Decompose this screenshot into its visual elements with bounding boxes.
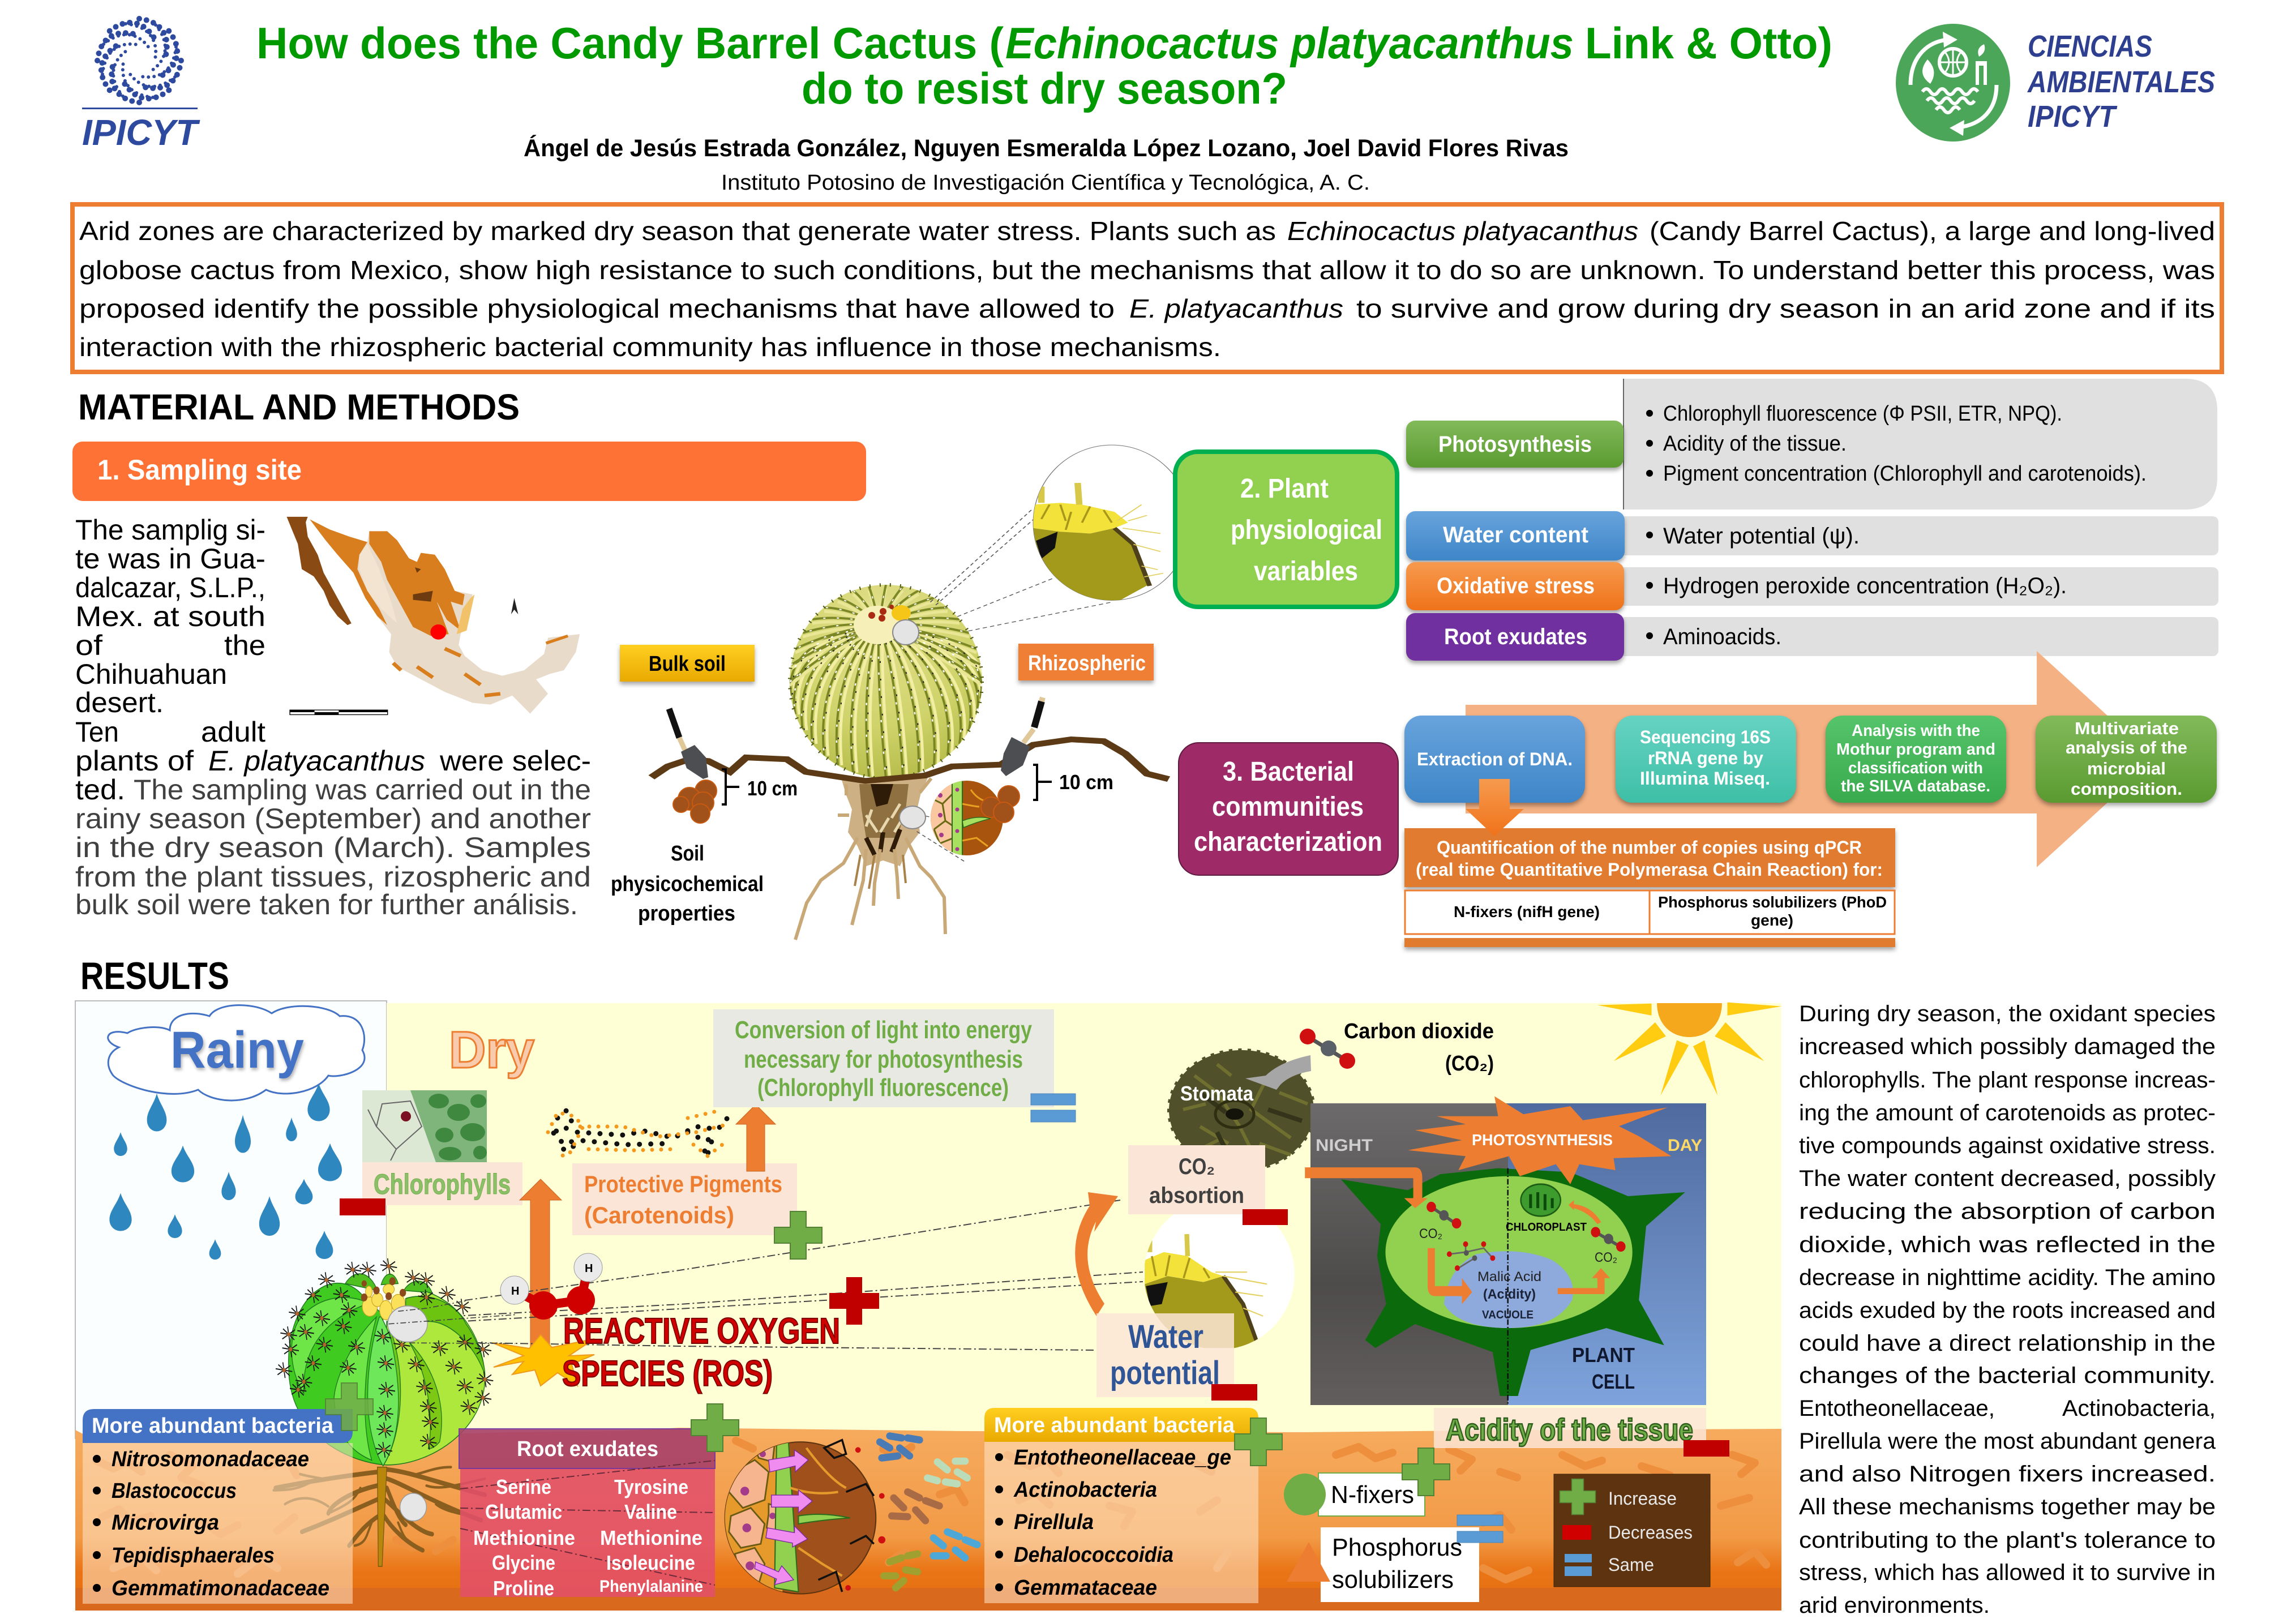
step: sequencing: Sequencing 16S bbox=[1640, 727, 1771, 747]
text: reactive oxygen species bbox=[562, 1311, 840, 1394]
text: sampling site description: plants of bbox=[75, 745, 194, 777]
step: extraction of DNA: Extraction of DNA. bbox=[1417, 749, 1573, 769]
text: sampling site description: Mex. at south bbox=[75, 601, 265, 632]
label: Rhizospheric bbox=[1018, 644, 1154, 680]
panel: plant cell CAM diagram: PLANT bbox=[1572, 1343, 1635, 1367]
logo: IPICYT bbox=[82, 11, 200, 153]
title bbox=[256, 18, 1832, 113]
label: N-fixers bbox=[1284, 1473, 1425, 1516]
heading: results: RESULTS bbox=[80, 954, 229, 997]
text: sampling site description: E. platyacanthus bbox=[208, 745, 425, 777]
panel: bacteria dry: Entotheonellaceae_ge bbox=[1014, 1446, 1231, 1470]
panel: introduction: Echinocactus platyacanthus bbox=[1287, 216, 1638, 246]
panel: bacteria dry: More abundant bacteria bbox=[994, 1414, 1235, 1437]
step: multivariate analysis: microbial bbox=[2087, 759, 2166, 778]
icon: increase for root exudates bbox=[691, 1404, 739, 1451]
text: sampling site description: the bbox=[224, 629, 265, 661]
panel: plant cell CAM diagram: PHOTOSYNTHESIS bbox=[1472, 1131, 1613, 1149]
heading box: 2. Plant physiological variables: 2. Plant bbox=[1240, 474, 1329, 504]
panel: bacteria rainy bbox=[83, 1409, 353, 1604]
icon: same for phosphorus bbox=[1457, 1515, 1503, 1543]
label: 10 cm left: 10 cm bbox=[747, 777, 798, 800]
affiliation: Instituto Potosino de Investigación Científica y Tecnológica, A. C. bbox=[721, 171, 1370, 195]
background: soil bbox=[75, 1428, 1781, 1611]
arrow: from extraction to qPCR bbox=[1466, 779, 1524, 836]
label box: water potential bbox=[1096, 1313, 1234, 1397]
icon: zoomed cactus crown in results bbox=[1144, 1214, 1295, 1348]
panel: bacteria rainy: Tepidisphaerales bbox=[112, 1544, 275, 1568]
step: analysis: Mothur program and bbox=[1836, 740, 1995, 759]
text: sampling site description: adult bbox=[201, 716, 265, 748]
cloud: Rainy: Rainy bbox=[170, 1021, 304, 1079]
text: sampling site description: Ten bbox=[75, 716, 119, 748]
label box: acidity of the tissue: Acidity of the tissue bbox=[1446, 1413, 1693, 1447]
arrow: bacterial workflow bbox=[1466, 651, 2155, 867]
text: reactive oxygen species: REACTIVE OXYGEN bbox=[563, 1311, 840, 1351]
label box: chlorophylls bbox=[362, 1162, 522, 1205]
icon: increase for N-fixers bbox=[1402, 1448, 1450, 1496]
label: Soil physicochemical properties bbox=[611, 842, 764, 926]
heading bar: 1. Sampling site bbox=[72, 442, 866, 501]
icon: rain drops bbox=[109, 1084, 342, 1260]
label box: CO2 absortion: absortion bbox=[1149, 1183, 1244, 1208]
icon: molecule hydrogen peroxide: H bbox=[511, 1285, 519, 1297]
label box: water potential: Water bbox=[1128, 1318, 1203, 1355]
text: sampling site description: ted. bbox=[75, 774, 125, 806]
icon: stomata bbox=[1169, 1050, 1314, 1170]
label: carbon dioxide: Carbon dioxide bbox=[1344, 1020, 1494, 1043]
text: sampling site description: in the dry season (March). Samples bbox=[75, 832, 591, 863]
label box: conversion of light bbox=[713, 1009, 1054, 1107]
icon: decrease for CO2 absortion bbox=[1243, 1209, 1288, 1225]
panel: root exudates list: Glutamic bbox=[485, 1500, 562, 1523]
heading bar: 1. Sampling site: 1. Sampling site bbox=[97, 454, 302, 486]
panel: introduction: (Candy Barrel Cactus), a large and long-lived bbox=[1650, 216, 2215, 246]
step: multivariate analysis: analysis of the bbox=[2066, 738, 2187, 757]
cactus spines bbox=[276, 1258, 493, 1458]
label: Rhizospheric: Rhizospheric bbox=[1028, 652, 1146, 675]
title: do to resist dry season? bbox=[802, 63, 1287, 113]
text: results discussion: chlorophylls. The plant response increas- bbox=[1799, 1068, 2216, 1093]
text: sampling site description: Chihuahuan bbox=[75, 658, 227, 690]
logo: Ciencias Ambientales IPICYT: IPICYT bbox=[2028, 100, 2118, 134]
icon: increase for carotenoids bbox=[774, 1211, 822, 1259]
icon: stomata: Stomata bbox=[1180, 1082, 1254, 1105]
text: sampling site description: te was in Gua- bbox=[75, 543, 265, 575]
legend bbox=[1554, 1474, 1710, 1587]
panel: photosynthesis measurements bbox=[1406, 379, 2217, 509]
label: phosphorus solubilizers: Phosphorus bbox=[1332, 1534, 1462, 1561]
label box: conversion of light: (Chlorophyll fluorescence) bbox=[757, 1074, 1009, 1102]
icon: same for fluorescence bbox=[1031, 1094, 1076, 1122]
label box: protective pigments: (Carotenoids) bbox=[584, 1202, 734, 1228]
panel: bacteria dry: Actinobacteria bbox=[1013, 1478, 1157, 1502]
step: sequencing bbox=[1616, 716, 1796, 803]
icon: CO2 molecule bbox=[1300, 1029, 1355, 1069]
text: results discussion: dioxide, which was reflected in the bbox=[1799, 1232, 2216, 1257]
panel: photosynthesis measurements: Photosynthesis bbox=[1438, 432, 1592, 457]
panel: root exudates list: Root exudates bbox=[517, 1437, 658, 1461]
panel: root exudates list: Glycine bbox=[492, 1551, 555, 1574]
image: carotene molecule bbox=[548, 1111, 730, 1156]
table: qPCR quantification: (real time Quantitative Polymerasa Chain Reaction) for: bbox=[1416, 859, 1883, 880]
panel: introduction: E. platyacanthus bbox=[1129, 294, 1343, 323]
step: analysis: classification with bbox=[1848, 759, 1983, 777]
label box: water potential: potential bbox=[1110, 1355, 1220, 1391]
text: results discussion: Pirellula were the most abundant genera bbox=[1799, 1429, 2216, 1454]
label: Soil physicochemical properties: physicochemical bbox=[611, 872, 764, 896]
step: multivariate analysis: composition. bbox=[2071, 779, 2182, 799]
cloud: Rainy bbox=[108, 1005, 365, 1100]
text: results discussion: decrease in nighttime acidity. The amino bbox=[1799, 1265, 2216, 1290]
text: sampling site description: desert. bbox=[75, 687, 164, 718]
arrow: water potential to CO2 absorption bbox=[1075, 1192, 1118, 1316]
heading box: 2. Plant physiological variables bbox=[1175, 452, 1397, 607]
panel: bacteria rainy: Nitrosomonadaceae bbox=[112, 1448, 309, 1471]
label: Bulk soil bbox=[620, 645, 755, 682]
logo: Ciencias Ambientales IPICYT bbox=[1896, 24, 2215, 142]
panel: root exudates: Root exudates bbox=[1444, 624, 1587, 649]
label: phosphorus solubilizers bbox=[1287, 1527, 1479, 1602]
label box: chlorophylls: Chlorophylls bbox=[374, 1168, 511, 1200]
label: 10 cm right bbox=[1033, 765, 1113, 800]
text: sampling site description: rainy season (September) and another bbox=[75, 803, 591, 834]
icon: rhizosphere detail bbox=[928, 778, 1020, 858]
panel: root exudates list: Proline bbox=[493, 1577, 554, 1600]
table: qPCR quantification: Quantification of the number of copies using qPCR bbox=[1437, 837, 1862, 858]
label box: CO2 absortion: CO₂ bbox=[1179, 1154, 1215, 1179]
panel: root exudates list: Phenylalanine bbox=[599, 1577, 703, 1596]
text: results discussion: changes of the bacterial community. bbox=[1799, 1363, 2216, 1388]
panel: introduction: globose cactus from Mexico, show high resistance to such conditions, but the mechanisms that allow it to do so are unknown. To understand better this process, was bbox=[79, 255, 2215, 285]
panel: root exudates list: Tyrosine bbox=[614, 1475, 688, 1498]
cactus roots bbox=[795, 777, 945, 940]
label: carbon dioxide: (CO₂) bbox=[1445, 1052, 1494, 1076]
label: Bulk soil: Bulk soil bbox=[649, 652, 726, 676]
text: results discussion: increased which possibly damaged the bbox=[1799, 1034, 2216, 1059]
text: results discussion: ing the amount of carotenoids as protec- bbox=[1799, 1100, 2216, 1125]
panel: introduction: to survive and grow during dry season in an arid zone and if its bbox=[1356, 294, 2215, 323]
table: qPCR quantification: gene) bbox=[1751, 911, 1793, 929]
icon: molecule hydrogen peroxide bbox=[500, 1253, 602, 1320]
arrow: pigments to photosynthesis bbox=[736, 1104, 776, 1171]
panel: introduction: proposed identify the possible physiological mechanisms that have allowed to bbox=[79, 294, 1115, 323]
panel: plant cell CAM diagram: Malic Acid bbox=[1477, 1269, 1541, 1284]
panel: water content: Water potential (ψ). bbox=[1663, 524, 1860, 549]
panel: root exudates list: Methionine bbox=[600, 1526, 702, 1549]
background: dry side bbox=[387, 1003, 1781, 1439]
title: Link & Otto) bbox=[1585, 18, 1832, 68]
step: multivariate analysis: Multivariate bbox=[2075, 718, 2179, 738]
label: carbon dioxide bbox=[1344, 1020, 1494, 1076]
icon: right shovel bbox=[1001, 697, 1043, 776]
label: 10 cm right: 10 cm bbox=[1059, 770, 1113, 794]
text: results discussion: contributing to the plant's tolerance to bbox=[1799, 1528, 2216, 1553]
heading box: 3. Bacterial communities characterization: communities bbox=[1212, 792, 1364, 822]
cactus body bbox=[289, 1274, 485, 1466]
cactus flowers bbox=[362, 1284, 405, 1320]
panel: root exudates bbox=[1406, 613, 2218, 661]
panel: plant cell CAM diagram bbox=[1305, 1096, 1706, 1405]
icon: increase for rainy bacteria bbox=[325, 1383, 373, 1431]
text: sampling site description: The sampling was carried out in the bbox=[134, 774, 591, 806]
legend: Decreases bbox=[1608, 1522, 1693, 1543]
text: sampling site description: were selec- bbox=[439, 745, 591, 777]
text: results discussion: and also Nitrogen fixers increased. bbox=[1799, 1462, 2216, 1487]
step: sequencing: Illumina Miseq. bbox=[1640, 768, 1770, 789]
arrow: ROS to protective pigments bbox=[520, 1179, 562, 1356]
logo: Ciencias Ambientales IPICYT: CIENCIAS bbox=[2028, 29, 2152, 63]
panel: plant cell CAM diagram: CO₂ bbox=[1419, 1226, 1442, 1241]
background: rainy side bbox=[75, 1001, 387, 1438]
text: results discussion: tive compounds against oxidative stress. bbox=[1799, 1133, 2216, 1158]
label: N-fixers: N-fixers bbox=[1331, 1481, 1414, 1509]
image: chlorophyll bbox=[362, 1090, 487, 1162]
panel: bacteria dry bbox=[984, 1408, 1258, 1603]
panel: root exudates list: Valine bbox=[624, 1500, 677, 1523]
text: sampling site description: dalcazar, S.L.P., bbox=[75, 572, 265, 603]
table: qPCR quantification: Phosphorus solubilizers (PhoD bbox=[1658, 893, 1887, 911]
panel: root exudates list: Methionine bbox=[473, 1526, 575, 1549]
panel: bacteria dry: Dehalococcoidia bbox=[1014, 1543, 1173, 1567]
panel: plant cell CAM diagram: CELL bbox=[1592, 1370, 1635, 1393]
logo: Ciencias Ambientales IPICYT: AMBIENTALES bbox=[2027, 65, 2215, 99]
label: Soil physicochemical properties: properties bbox=[638, 902, 735, 926]
arrow: CO2 into stomata bbox=[1245, 1055, 1311, 1090]
text: results discussion: Actinobacteria, bbox=[2062, 1396, 2216, 1421]
text: results discussion: Entotheonellaceae, bbox=[1799, 1396, 1995, 1421]
title: Echinocactus platyacanthus bbox=[1005, 18, 1574, 68]
text: results discussion bbox=[1799, 1001, 2216, 1618]
heading box: 3. Bacterial communities characterization: characterization bbox=[1194, 827, 1382, 857]
text: sampling site description: from the plant tissues, rizospheric and bbox=[75, 861, 591, 893]
panel: introduction bbox=[72, 204, 2222, 372]
icon: increase for dry bacteria bbox=[1235, 1418, 1282, 1466]
panel: water content: Water content bbox=[1443, 523, 1588, 547]
icon: decrease for chlorophylls bbox=[340, 1198, 385, 1215]
icon: explosion star bbox=[492, 1335, 594, 1386]
text: results discussion: stress, which has allowed it to survive in bbox=[1799, 1560, 2216, 1585]
panel: introduction: interaction with the rhizospheric bacterial community has influence in those mechanisms. bbox=[79, 332, 1221, 362]
illustration: rhizosphere with exudate arrows bbox=[723, 1436, 977, 1600]
text: results discussion: arid environments. bbox=[1799, 1593, 1990, 1618]
text: results discussion: The water content decreased, possibly bbox=[1799, 1166, 2216, 1191]
icon: decrease for water potential bbox=[1211, 1384, 1257, 1401]
panel: root exudates list: Serine bbox=[496, 1475, 551, 1498]
label box: conversion of light: Conversion of light into energy bbox=[735, 1016, 1032, 1044]
dotted leader lines from cartoon cactus bbox=[413, 1200, 1143, 1350]
icon: left shovel and soil bbox=[669, 709, 717, 823]
heading box: 2. Plant physiological variables: physiological bbox=[1231, 515, 1382, 545]
ground line bbox=[652, 739, 1168, 781]
icon: decrease for acidity bbox=[1684, 1440, 1729, 1457]
label: 10 cm left bbox=[722, 769, 798, 804]
icon: sun bbox=[1597, 1003, 1781, 1095]
step: analysis bbox=[1826, 716, 2006, 803]
text: sampling site description: The samplig si- bbox=[75, 514, 265, 546]
step: sequencing: rRNA gene by bbox=[1648, 748, 1763, 768]
panel: oxidative stress: Oxidative stress bbox=[1437, 573, 1595, 598]
legend: Same bbox=[1608, 1555, 1654, 1575]
text: results discussion: acids exuded by the roots increased and bbox=[1799, 1298, 2216, 1323]
logo: IPICYT: IPICYT bbox=[82, 112, 200, 153]
label box: CO2 absortion bbox=[1128, 1145, 1265, 1214]
text: sampling site description bbox=[75, 514, 591, 920]
illustration: cartoon barrel cactus bbox=[273, 1258, 515, 1566]
step: multivariate analysis bbox=[2036, 716, 2217, 803]
illustration: big barrel cactus with sampling points bbox=[652, 508, 1168, 940]
icon: increase for ROS bbox=[829, 1277, 879, 1325]
icon: molecule hydrogen peroxide: H bbox=[585, 1262, 593, 1275]
text: results discussion: During dry season, the oxidant species bbox=[1799, 1001, 2216, 1026]
text: results discussion: All these mechanisms together may be bbox=[1799, 1494, 2216, 1519]
panel: water content bbox=[1406, 511, 2218, 560]
panel: plant cell CAM diagram: DAY bbox=[1668, 1136, 1702, 1155]
panel: root exudates list bbox=[459, 1429, 715, 1600]
panel: photosynthesis measurements: Acidity of the tissue. bbox=[1663, 432, 1847, 456]
panel: bacteria rainy: More abundant bacteria bbox=[92, 1414, 334, 1438]
panel: bacteria rainy: Microvirga bbox=[112, 1511, 219, 1535]
heading box: 2. Plant physiological variables: variables bbox=[1254, 556, 1358, 586]
panel: bacteria dry: Pirellula bbox=[1014, 1510, 1094, 1534]
panel: photosynthesis measurements: Pigment concentration (Chlorophyll and carotenoids). bbox=[1663, 462, 2147, 486]
table: qPCR quantification bbox=[1404, 828, 1895, 947]
map: Mexico sampling site bbox=[286, 517, 580, 714]
panel: oxidative stress bbox=[1406, 562, 2218, 610]
text: sampling site description: of bbox=[75, 629, 102, 661]
panel: bacteria rainy: Gemmatimonadaceae bbox=[112, 1577, 329, 1600]
title: How does the Candy Barrel Cactus ( bbox=[256, 18, 1004, 68]
heading box: 3. Bacterial communities characterization: 3. Bacterial bbox=[1223, 757, 1354, 787]
panel: results diagram bbox=[75, 1001, 1781, 1611]
panel: bacteria rainy: Blastococcus bbox=[112, 1479, 237, 1503]
label box: protective pigments bbox=[572, 1163, 797, 1235]
panel: plant cell CAM diagram: NIGHT bbox=[1316, 1136, 1373, 1155]
label: Dry: Dry bbox=[449, 1021, 534, 1079]
text: results discussion: could have a direct relationship in the bbox=[1799, 1331, 2216, 1356]
panel: bacteria dry: Gemmataceae bbox=[1014, 1576, 1157, 1600]
step: analysis: Analysis with the bbox=[1852, 722, 1980, 740]
heading box: 3. Bacterial communities characterization bbox=[1179, 743, 1398, 875]
label box: conversion of light: necessary for photosynthesis bbox=[744, 1046, 1023, 1073]
panel: root exudates: Aminoacids. bbox=[1663, 624, 1781, 649]
legend: Increase bbox=[1608, 1488, 1677, 1509]
step: extraction of DNA bbox=[1404, 716, 1585, 803]
panel: photosynthesis measurements: Chlorophyll fluorescence (Φ PSII, ETR, NPQ). bbox=[1663, 402, 2062, 426]
heading: material and methods: MATERIAL AND METHODS bbox=[78, 387, 520, 427]
icon: zoomed cactus crown bbox=[1033, 445, 1173, 601]
table: qPCR quantification: N-fixers (nifH gene) bbox=[1454, 903, 1600, 920]
panel: plant cell CAM diagram: (Acidity) bbox=[1483, 1287, 1536, 1302]
cartoon cactus roots bbox=[273, 1467, 485, 1551]
label: phosphorus solubilizers: solubilizers bbox=[1332, 1566, 1454, 1594]
label box: protective pigments: Protective Pigments bbox=[584, 1171, 782, 1197]
authors: Ángel de Jesús Estrada González, Nguyen Esmeralda López Lozano, Joel David Flores Rivas bbox=[524, 135, 1569, 162]
panel: plant cell CAM diagram: VACUOLE bbox=[1482, 1309, 1533, 1321]
dotted leader lines bbox=[903, 508, 1112, 862]
panel: plant cell CAM diagram: CO₂ bbox=[1595, 1250, 1617, 1265]
panel: introduction: Arid zones are characterized by marked dry season that generate water stress. Plants such as bbox=[79, 216, 1276, 246]
label: Soil physicochemical properties: Soil bbox=[671, 842, 704, 866]
root sampling circle bbox=[899, 806, 926, 829]
text: results discussion: reducing the absorption of carbon bbox=[1799, 1199, 2216, 1224]
panel: root exudates list: Isoleucine bbox=[606, 1551, 695, 1574]
text: sampling site description: bulk soil were taken for further análisis. bbox=[75, 889, 578, 920]
panel: plant cell CAM diagram: CHLOROPLAST bbox=[1506, 1221, 1587, 1234]
step: analysis: the SILVA database. bbox=[1841, 777, 1990, 795]
text: reactive oxygen species: SPECIES (ROS) bbox=[562, 1353, 773, 1394]
panel: oxidative stress: Hydrogen peroxide concentration (H₂O₂). bbox=[1663, 573, 2067, 598]
